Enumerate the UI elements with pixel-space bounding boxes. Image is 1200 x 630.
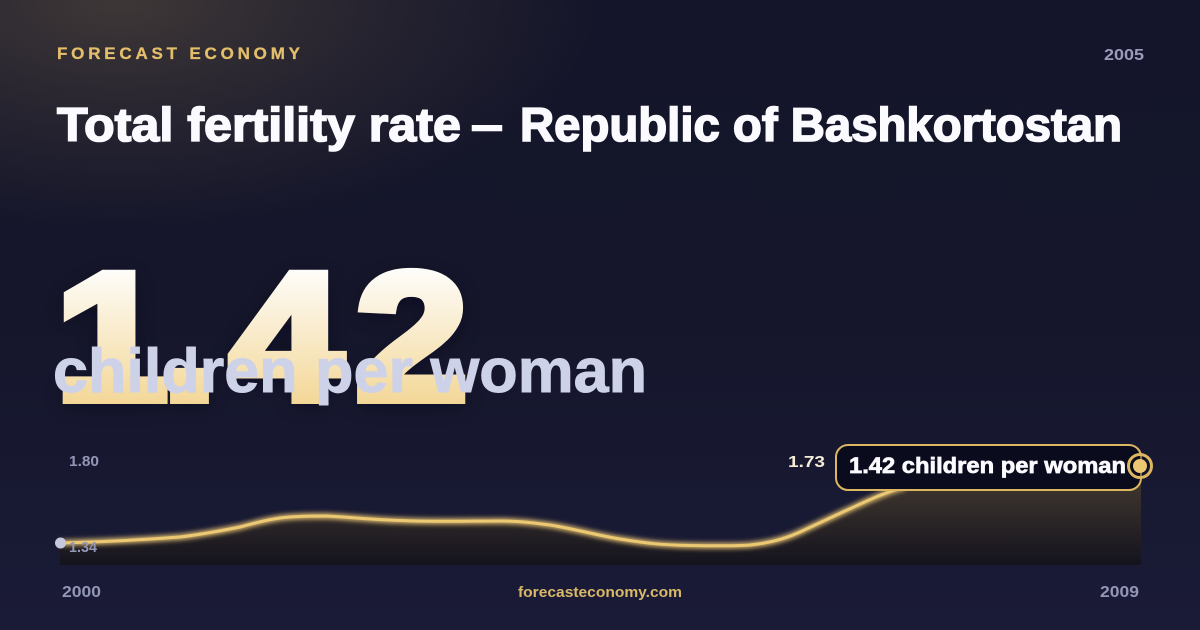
callout: 1.42 children per woman [849, 453, 1126, 478]
axis label: max: 1.80 [69, 454, 99, 470]
data line [60, 487, 905, 546]
x axis label: end year: 2009 [1100, 584, 1139, 601]
title: Republic of Bashkortostan [520, 98, 1122, 151]
chart [55, 445, 1152, 565]
title [57, 98, 1122, 151]
x axis label: start year: 2000 [62, 584, 101, 601]
big number: 1.42 [55, 235, 468, 438]
peak value label: 1.73 [788, 454, 825, 471]
source url: forecasteconomy.com [518, 584, 682, 601]
brand label: FORECAST ECONOMY [57, 44, 301, 63]
start point [55, 538, 66, 548]
line glow [60, 487, 905, 546]
year label: top right: 2005 [1104, 47, 1144, 64]
axis label: min: 1.34 [69, 540, 97, 556]
big number: 1.42 [55, 239, 468, 443]
title: Total fertility rate [57, 98, 461, 151]
area under line [60, 466, 1141, 565]
end point marker [1128, 454, 1152, 478]
unit label: children per woman [53, 337, 647, 406]
title: – [471, 98, 503, 151]
callout [836, 445, 1141, 490]
